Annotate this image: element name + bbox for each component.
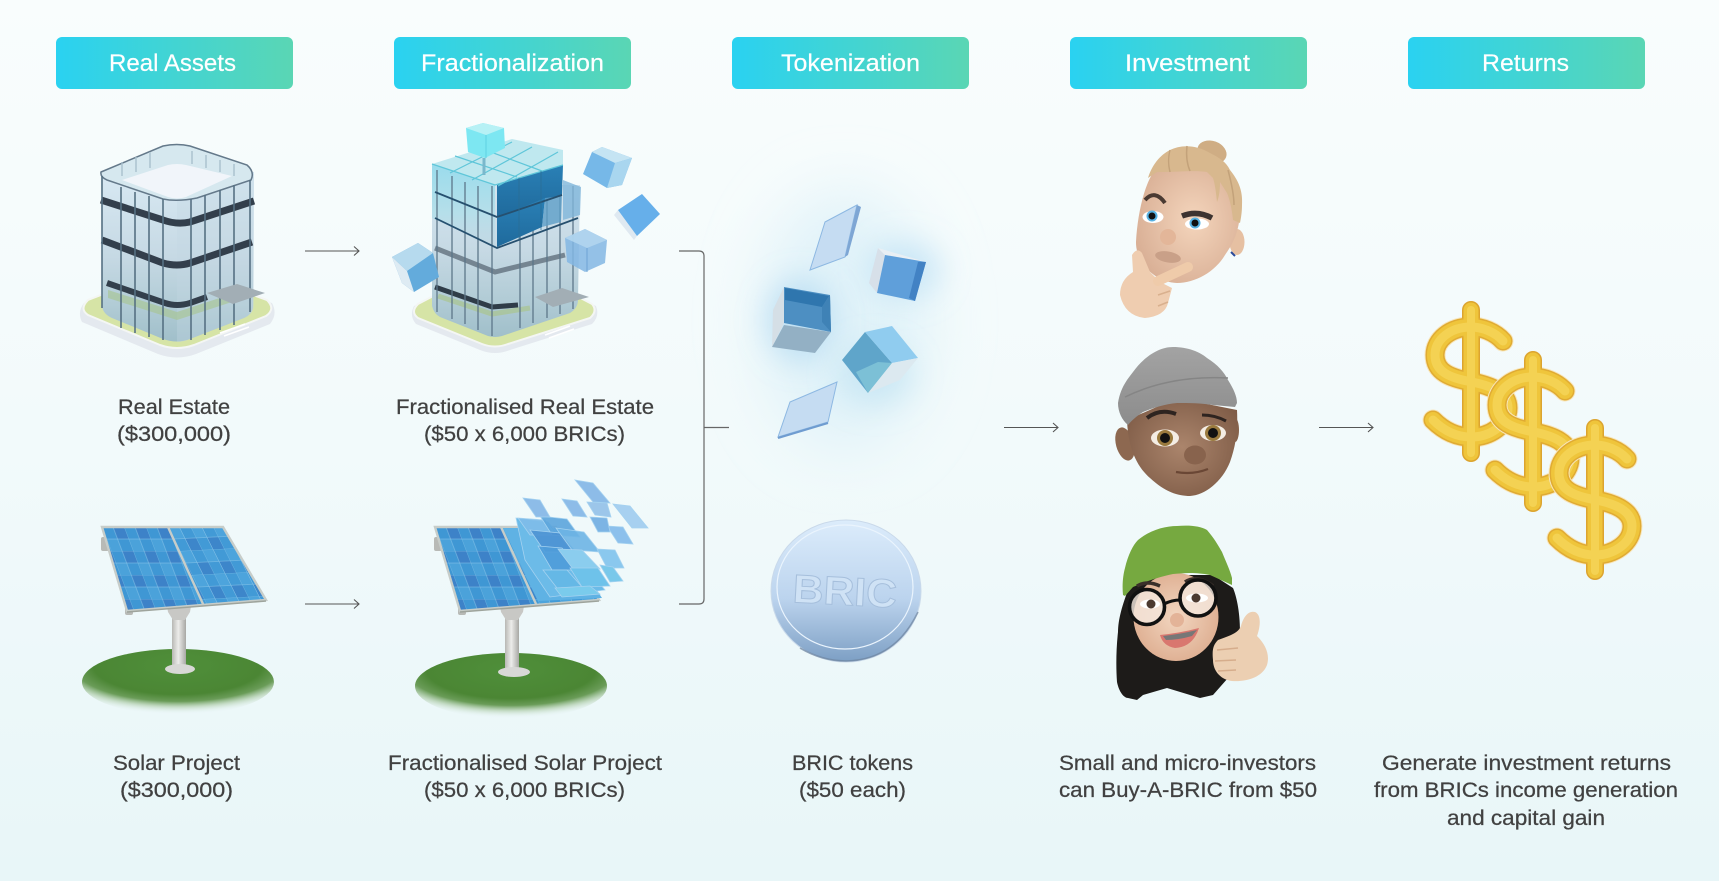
text: Solar Project: ($300,000) [120, 779, 233, 802]
heading: Fractionalization: Fractionalization [421, 50, 604, 77]
text: Real Estate: Real Estate [118, 396, 230, 419]
text: BRIC tokens [792, 752, 913, 802]
text: Fractionalised Real Estate: Fractionalised Real Estate [396, 396, 654, 419]
text: investors caption: can Buy-A-BRIC from $50 [1059, 779, 1317, 802]
text: returns caption [1374, 752, 1678, 830]
icon: memoji girl with green beanie [1116, 526, 1268, 700]
text: returns caption: from BRICs income generation [1374, 779, 1678, 802]
bracket connector [679, 251, 729, 604]
arrow: solar to fractionalised solar [305, 600, 359, 608]
text: investors caption: Small and micro-investors [1059, 752, 1316, 775]
text: returns caption: Generate investment returns [1382, 752, 1671, 775]
text: Fractionalised Real Estate: ($50 x 6,000 BRICs) [424, 423, 625, 446]
heading: Tokenization [732, 37, 969, 89]
heading: Real Assets [56, 37, 293, 89]
sub-icon: tile fragments [516, 480, 648, 597]
icon: fractionalised building [392, 123, 660, 353]
text: Real Estate [117, 396, 231, 446]
text: Fractionalised Solar Project: ($50 x 6,000 BRICs) [424, 779, 625, 802]
icon: BRIC coin: BRIC [792, 567, 898, 617]
icon: gold dollar signs [1433, 310, 1632, 571]
icon: solar panel on grass [82, 527, 274, 715]
arrow: investors to returns [1319, 423, 1373, 432]
text: BRIC tokens: BRIC tokens [792, 752, 913, 775]
text: returns caption: and capital gain [1447, 807, 1605, 830]
text: Fractionalised Solar Project: Fractionalised Solar Project [388, 752, 662, 775]
arrow: tokens to investors [1004, 423, 1058, 432]
icon: fractionalised solar panel [415, 480, 648, 719]
text: Real Estate: ($300,000) [117, 423, 231, 446]
heading: Investment [1070, 37, 1307, 89]
icon: memoji boy with grey beanie [1112, 347, 1239, 496]
heading: Real Assets: Real Assets [109, 50, 236, 77]
text: Fractionalised Solar Project [388, 752, 662, 802]
heading: Returns: Returns [1482, 50, 1569, 77]
arrow: building to fractionalised building [305, 246, 359, 256]
sub-icon: floating cubes around building [392, 123, 660, 292]
heading: Fractionalization [394, 37, 631, 89]
icon: BRIC coin [771, 520, 921, 662]
text: Solar Project: Solar Project [113, 752, 240, 775]
heading: Investment: Investment [1125, 50, 1250, 77]
icon: memoji man with bun [1120, 137, 1244, 318]
text: investors caption [1059, 752, 1317, 802]
icon: glass office building [80, 144, 275, 358]
heading: Returns [1408, 37, 1645, 89]
text: BRIC tokens: ($50 each) [799, 779, 906, 802]
text: Fractionalised Real Estate [396, 396, 654, 446]
heading: Tokenization: Tokenization [781, 50, 920, 77]
icon: floating BRIC cubes [760, 190, 941, 450]
text: Solar Project [113, 752, 240, 802]
